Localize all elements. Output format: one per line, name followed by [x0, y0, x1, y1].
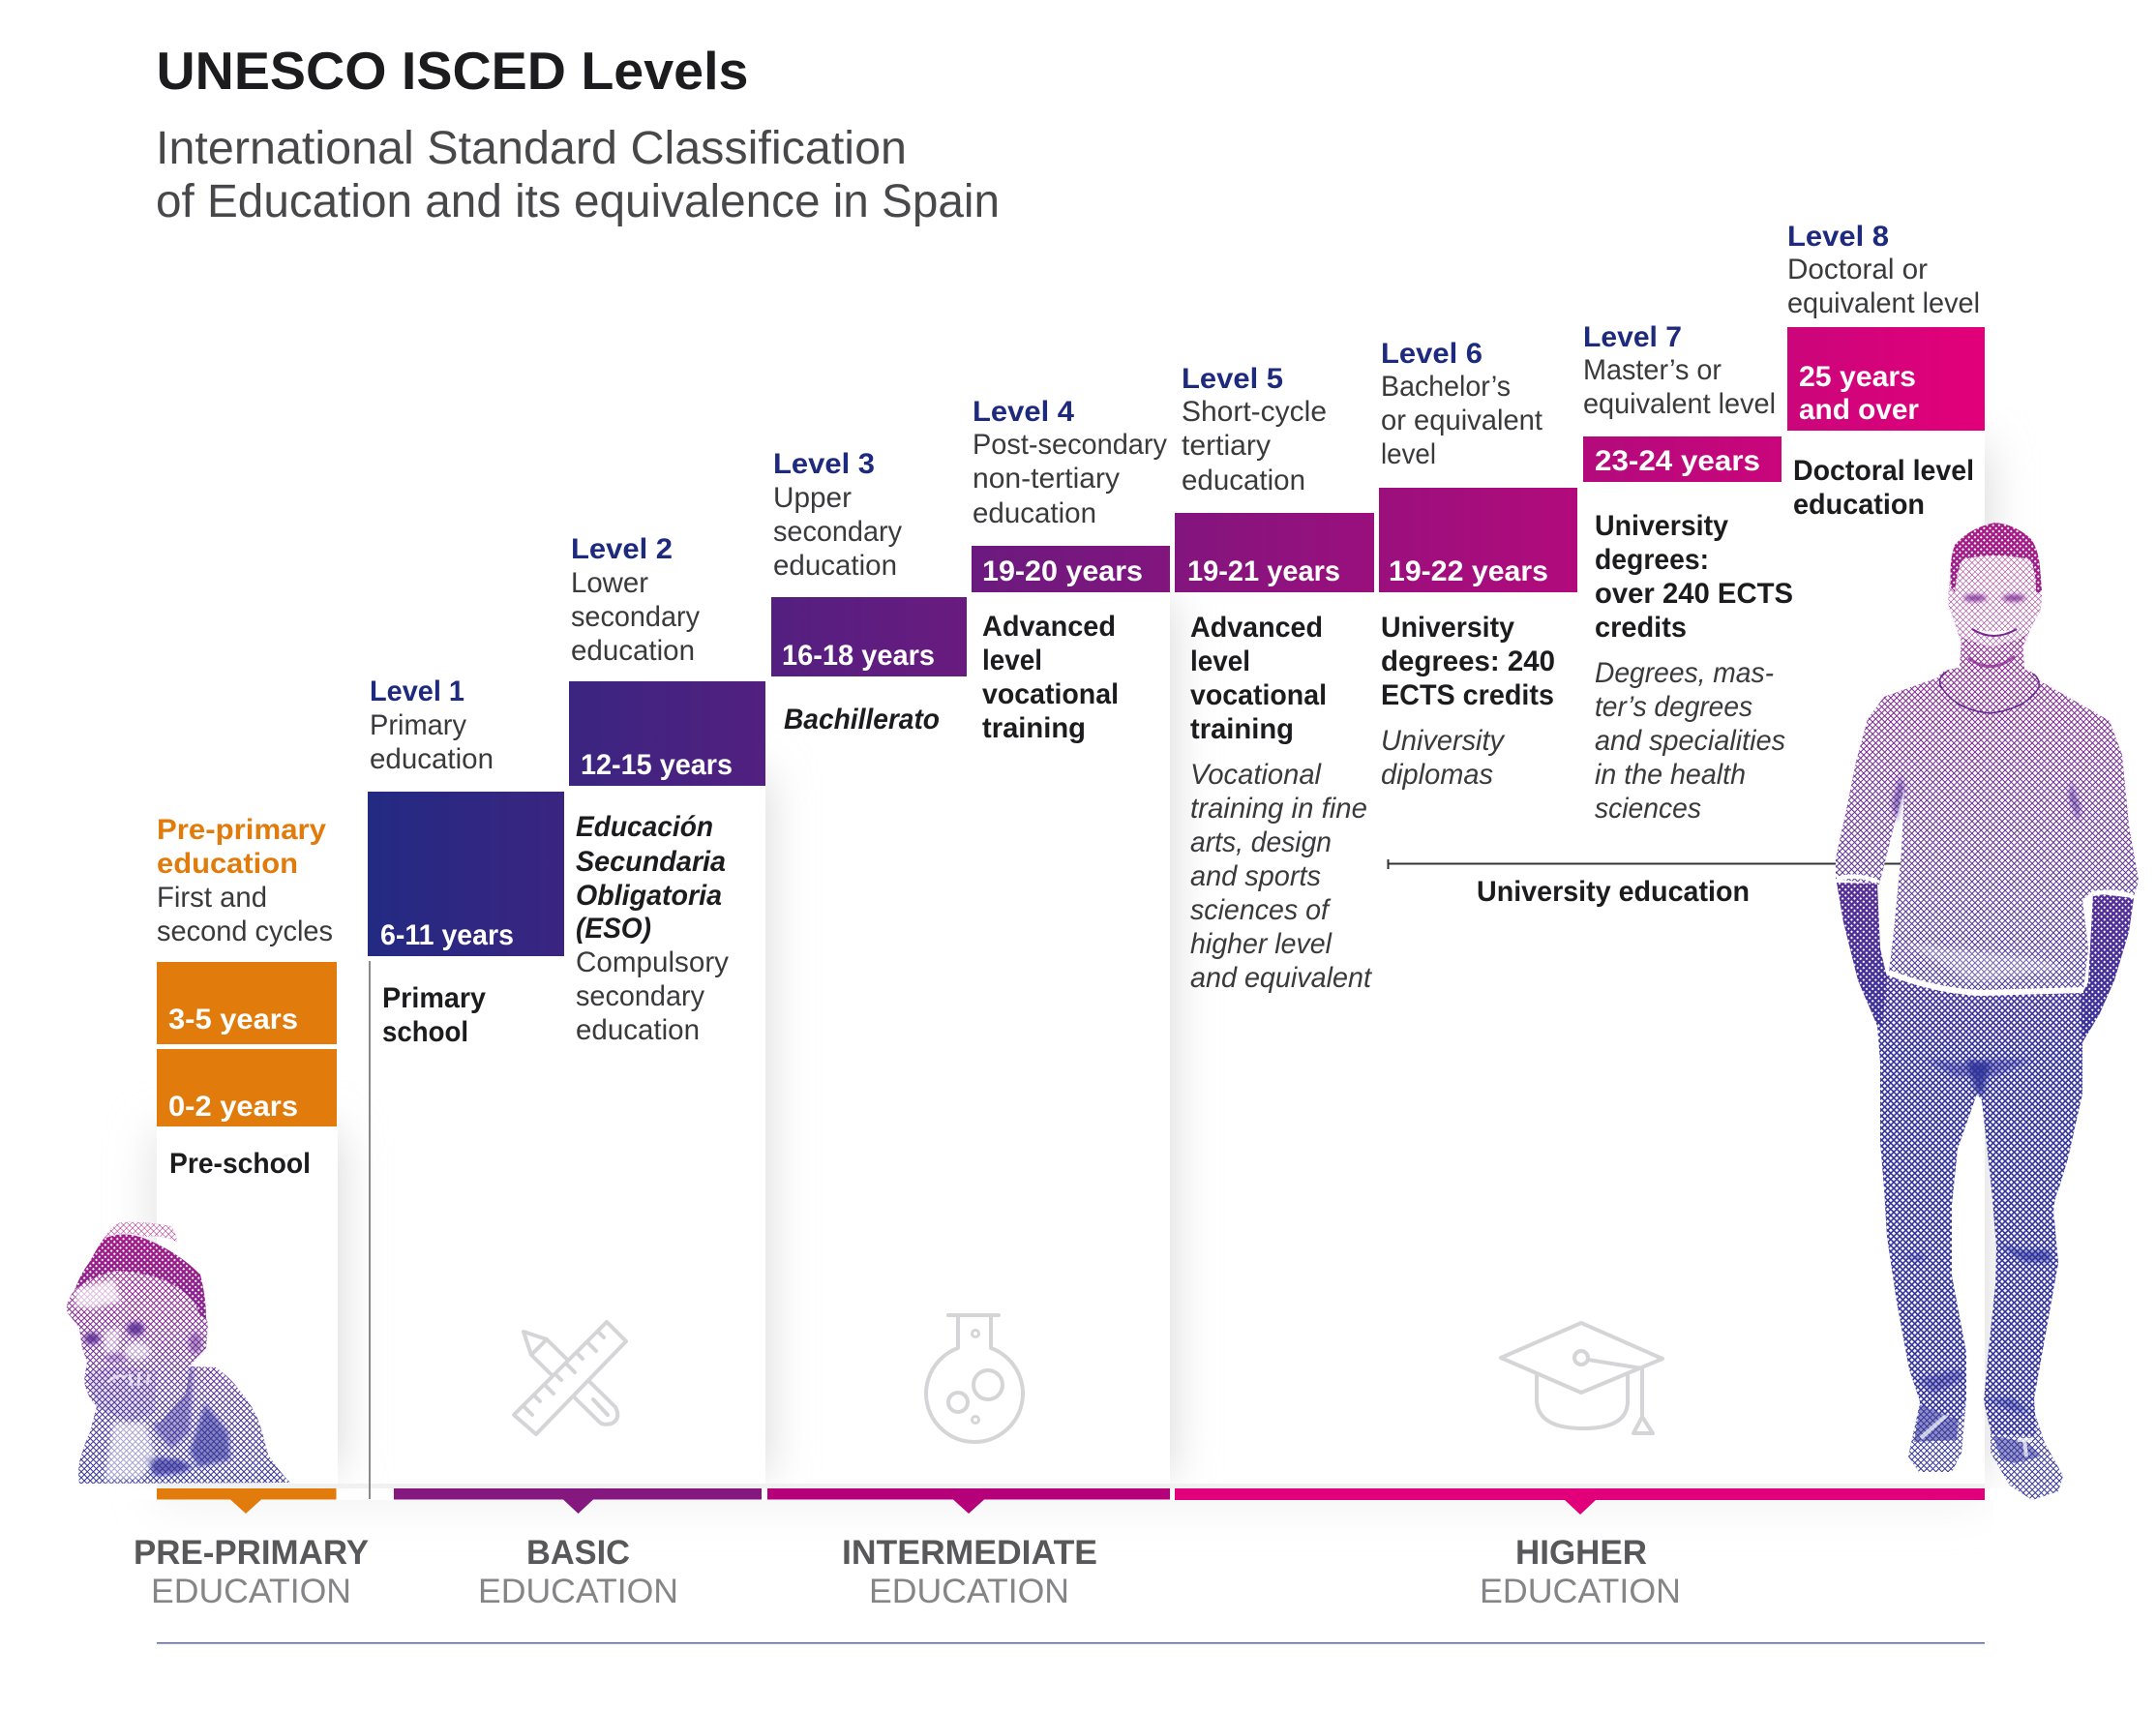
- label: basic education: EDUCATION: [478, 1573, 678, 1610]
- panel: level 2: Educación: [576, 811, 713, 843]
- man: neck and collar: [1938, 639, 2039, 713]
- panel: pre-primary education: First and: [157, 882, 267, 914]
- panel: level 6: ECTS credits: [1381, 679, 1554, 711]
- panel: level 5: higher level: [1190, 928, 1333, 960]
- panel: level 4: training: [982, 712, 1086, 744]
- label: basic education: [478, 1534, 678, 1610]
- panel: level 5: training in fine: [1190, 793, 1367, 825]
- panel: level 6: Level 6: [1381, 338, 1482, 370]
- panel: level 2: Secundaria: [576, 846, 726, 878]
- panel: level 1: Level 1: [370, 675, 464, 707]
- panel: level 2: Obligatoria: [576, 880, 722, 912]
- panel: level 2: Lower: [571, 567, 648, 599]
- panel: level 1: Primary: [370, 709, 466, 741]
- panel: level 5: and equivalent: [1190, 962, 1373, 994]
- label: intermediate education: INTERMEDIATE: [842, 1534, 1097, 1572]
- panel: level 6: or equivalent: [1381, 405, 1543, 436]
- panel: level 4: vocational: [982, 678, 1119, 710]
- panel: level 8: education: [1793, 489, 1925, 521]
- panel: level 3: [771, 448, 967, 735]
- university education bracket: University education: [1477, 876, 1750, 908]
- panel: level 3: Upper: [773, 482, 852, 514]
- panel: level 7: 23-24 years: [1595, 445, 1760, 477]
- panel: level 4: level: [982, 645, 1042, 676]
- panel: pre-primary education: Pre-primary: [157, 814, 326, 846]
- man: head: [1948, 523, 2042, 668]
- panel: level 8: Level 8: [1787, 221, 1889, 253]
- panel: level 7: over 240 ECTS: [1595, 578, 1793, 610]
- man: sweater: [1836, 677, 2139, 993]
- label: higher education: HIGHER: [1515, 1534, 1647, 1572]
- panel: level 6: diplomas: [1381, 759, 1493, 791]
- panel: level 2: education: [576, 1014, 700, 1046]
- label: pre-primary education: PRE-PRIMARY: [134, 1534, 369, 1572]
- label: intermediate education: [842, 1534, 1097, 1610]
- photo: baby: [67, 1222, 290, 1484]
- panel: level 4: [972, 396, 1170, 744]
- panel: level 5: Level 5: [1182, 363, 1283, 395]
- panel: level 2: education: [571, 635, 695, 667]
- panel: level 5: Vocational: [1190, 759, 1322, 791]
- panel: level 4: Post-secondary: [973, 429, 1167, 461]
- label: basic education: BASIC: [526, 1534, 630, 1572]
- panel: level 7: sciences: [1595, 793, 1701, 825]
- panel: level 6: 19-22 years: [1389, 555, 1548, 587]
- panel: level 8: and over: [1799, 394, 1919, 426]
- man: shoes: [1908, 1398, 2063, 1500]
- baby: hair: [75, 1222, 206, 1318]
- panel: level 7: in the health: [1595, 759, 1746, 791]
- panel: level 5: arts, design: [1190, 826, 1332, 858]
- panel: pre-primary education: second cycles: [157, 916, 333, 947]
- panel: level 6: Bachelor’s: [1381, 371, 1511, 403]
- panel: level 1: education: [370, 743, 494, 775]
- baby: face: [67, 1268, 208, 1423]
- panel: level 2: Compulsory: [576, 946, 729, 978]
- panel: level 5: level: [1190, 645, 1250, 677]
- panel: level 1: school: [382, 1016, 468, 1048]
- panel: level 7: Level 7: [1583, 321, 1682, 353]
- label: higher education: EDUCATION: [1480, 1573, 1681, 1610]
- bar: higher: [1175, 1488, 1985, 1515]
- stage bars: [157, 1488, 1985, 1515]
- panel: pre-primary education: Pre-school: [169, 1148, 311, 1180]
- panel: level 4: Advanced: [982, 611, 1116, 643]
- label: intermediate education: EDUCATION: [869, 1573, 1069, 1610]
- panel: level 7: ter’s degrees: [1595, 691, 1752, 723]
- panel: level 5: Advanced: [1190, 612, 1323, 644]
- label: pre-primary education: [134, 1534, 369, 1610]
- panel: level 5: Short-cycle: [1182, 396, 1327, 428]
- panel: level 7: equivalent level: [1583, 388, 1776, 420]
- panel: level 2: (ESO): [576, 913, 651, 945]
- subtitle: of Education and its equivalence in Spain: [156, 176, 1000, 227]
- panel: level 3: education: [773, 550, 897, 582]
- panel: pre-primary education: 0-2 years: [168, 1091, 298, 1123]
- panel: level 7: University: [1595, 510, 1728, 542]
- panel: level 2: 12-15 years: [581, 749, 733, 781]
- panel: level 7: Master’s or: [1583, 354, 1722, 386]
- baby: hand: [87, 1366, 157, 1421]
- panel: level 2: Level 2: [571, 533, 673, 565]
- bar: pre-primary: [157, 1488, 337, 1514]
- panel: pre-primary education: education: [157, 848, 298, 880]
- panel: level 6: University: [1381, 612, 1514, 644]
- panel: pre-primary education: 3-5 years: [168, 1004, 298, 1036]
- label: higher education: [1480, 1534, 1681, 1610]
- panel: level 1: 6-11 years: [380, 919, 514, 951]
- panel: level 7: credits: [1595, 612, 1687, 644]
- panel: level 8: equivalent level: [1787, 287, 1980, 319]
- panel: level 8: [1787, 221, 1985, 521]
- panel: level 6: degrees: 240: [1381, 645, 1555, 677]
- panel: level 2: secondary: [576, 980, 704, 1012]
- panel: level 7: [1583, 321, 1793, 825]
- subtitle: [156, 123, 1000, 227]
- panel: level 1: Primary: [382, 982, 486, 1014]
- title: UNESCO ISCED Levels: [157, 41, 749, 101]
- panel: level 8: Doctoral level: [1793, 455, 1974, 487]
- panel: level 5: 19-21 years: [1187, 555, 1340, 587]
- panel: level 3: secondary: [773, 516, 902, 548]
- panel: level 3: 16-18 years: [782, 640, 935, 672]
- panel: level 5: [1175, 363, 1374, 994]
- panel: level 8: Doctoral or: [1787, 254, 1928, 285]
- bar: intermediate: [767, 1488, 1170, 1514]
- panel: level 6: [1379, 338, 1577, 791]
- panel: level 2: secondary: [571, 601, 700, 633]
- label: pre-primary education: EDUCATION: [151, 1573, 351, 1610]
- panel: level 5: education: [1182, 465, 1305, 496]
- bottom rule: [157, 1642, 1985, 1644]
- panel: level 6: University: [1381, 725, 1506, 757]
- icon: graduation cap: [1501, 1323, 1662, 1433]
- man: beard: [1961, 635, 2026, 668]
- panel: level 7: Degrees, mas-: [1595, 657, 1774, 689]
- panel: level 6: level: [1381, 438, 1436, 470]
- panel: level 2: [569, 533, 765, 1046]
- panel: level 5: training: [1190, 713, 1294, 745]
- university education bracket: [1388, 859, 1910, 908]
- panel: level 8: 25 years: [1799, 361, 1916, 393]
- panel: pre-primary education: [157, 814, 337, 1180]
- panel: level 4: Level 4: [973, 396, 1074, 428]
- panel: level 5: vocational: [1190, 679, 1327, 711]
- man: trousers: [1877, 974, 2100, 1436]
- panel: level 5: sciences of: [1190, 894, 1332, 926]
- icon: pencil and ruler: [514, 1322, 626, 1434]
- photo: man: [1836, 523, 2139, 1500]
- panel: level 1: [368, 675, 564, 1499]
- panel: level 7: degrees:: [1595, 544, 1709, 576]
- panel: level 5: and sports: [1190, 860, 1321, 892]
- panel: level 7: and specialities: [1595, 725, 1785, 757]
- man: forearms: [1837, 883, 2134, 1042]
- panel: level 3: Level 3: [773, 448, 875, 480]
- panel: level 4: education: [973, 497, 1096, 529]
- panel: level 5: tertiary: [1182, 430, 1271, 462]
- baby: torso and sleeve: [78, 1366, 290, 1484]
- panel: level 4: 19-20 years: [982, 555, 1143, 587]
- column drop shadows: [157, 445, 1985, 1500]
- subtitle: International Standard Classification: [156, 123, 907, 174]
- panel: level 4: non-tertiary: [973, 463, 1120, 495]
- icon: flask: [926, 1315, 1023, 1442]
- panel: level 3: Bachillerato: [784, 704, 940, 735]
- bar: basic: [394, 1488, 762, 1514]
- man: hair: [1951, 523, 2042, 592]
